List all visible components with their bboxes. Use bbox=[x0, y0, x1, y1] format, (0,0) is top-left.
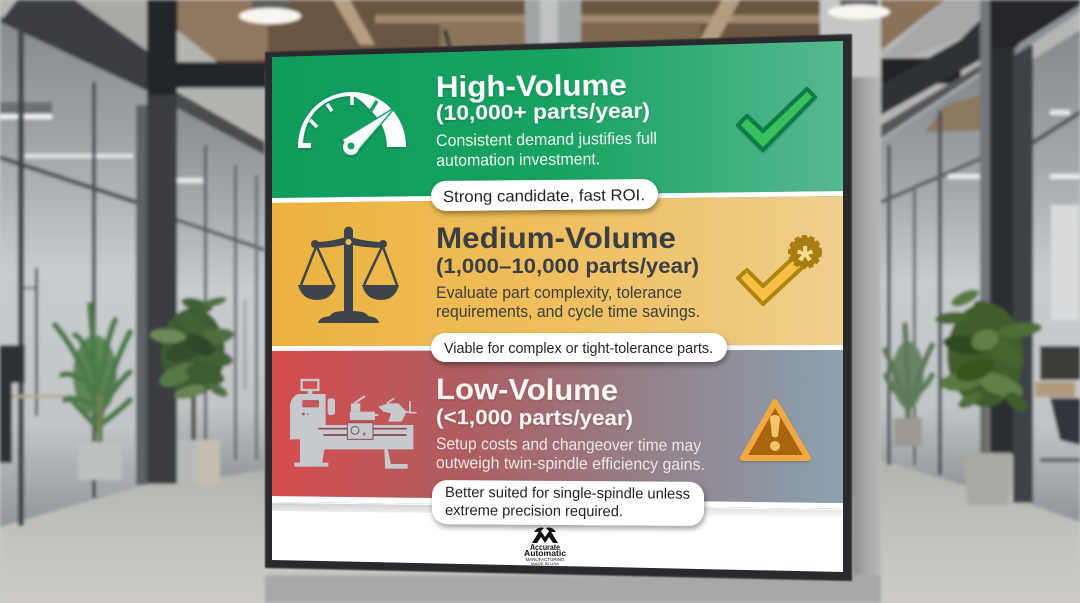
display frame bbox=[265, 34, 852, 581]
text: medium volume description bbox=[436, 284, 700, 321]
icon: warning triangle bbox=[743, 402, 808, 458]
callout: viable for complex parts bbox=[431, 333, 727, 362]
plant: left fig bbox=[149, 295, 235, 442]
panel: medium volume bbox=[272, 196, 843, 362]
panel: high volume bbox=[272, 41, 843, 211]
plant pot: left palm bbox=[78, 442, 122, 480]
panel: low volume bbox=[272, 350, 843, 572]
callout: viable for complex parts: Viable for complex or tight-tolerance parts. bbox=[444, 340, 713, 357]
callout: better suited for single-spindle bbox=[432, 480, 704, 526]
subheading: medium volume range: (1,000–10,000 parts/year) bbox=[436, 255, 699, 278]
ceiling bbox=[170, 0, 830, 70]
subheading: low volume range: (<1,000 parts/year) bbox=[436, 406, 633, 430]
logo: Accurate Automatic Manufacturing: Automatic bbox=[524, 549, 567, 558]
icon: speedometer gauge bbox=[298, 92, 406, 155]
callout: better suited for single-spindle: extreme precision required. bbox=[445, 502, 623, 520]
icon: check mark with asterisk badge: * bbox=[797, 237, 814, 284]
logo: Accurate Automatic Manufacturing: Accurate bbox=[530, 543, 560, 552]
text: medium volume description: Evaluate part complexity, tolerance bbox=[436, 284, 682, 302]
text: low volume description bbox=[436, 435, 705, 474]
floor bbox=[0, 470, 1080, 603]
plant: right fig bbox=[935, 286, 1043, 457]
plant pot: right fig bbox=[962, 453, 1012, 505]
ceiling lights bbox=[239, 0, 890, 24]
heading: Medium-Volume: Medium-Volume bbox=[436, 222, 676, 255]
callout: strong candidate bbox=[431, 179, 658, 211]
text: medium volume description: requirements, and cycle time savings. bbox=[436, 303, 700, 321]
logo: Accurate Automatic Manufacturing: MANUFACTURING bbox=[526, 557, 565, 562]
right glass wall bbox=[881, 0, 1080, 522]
far glass bay bbox=[177, 95, 265, 484]
heading: Low-Volume: Low-Volume bbox=[436, 373, 618, 407]
plant: small right background bbox=[885, 325, 932, 420]
display column bbox=[265, 0, 881, 603]
subheading: high volume range: (10,000+ parts/year) bbox=[436, 100, 650, 125]
logo: Accurate Automatic Manufacturing bbox=[524, 528, 567, 566]
callout: better suited for single-spindle: Better suited for single-spindle unless bbox=[445, 484, 690, 503]
logo: Accurate Automatic Manufacturing: MADE IN USA bbox=[531, 561, 559, 566]
callout: strong candidate: Strong candidate, fast ROI. bbox=[443, 187, 645, 206]
text: low volume description: Setup costs and changeover time may bbox=[436, 435, 702, 455]
icon: green check mark bbox=[738, 89, 815, 150]
text: high volume description bbox=[436, 130, 657, 170]
text: low volume description: outweigh twin-spindle efficiency gains. bbox=[436, 454, 705, 474]
icon: check mark with asterisk badge bbox=[738, 237, 820, 304]
plant: left palm bbox=[55, 305, 130, 440]
heading: High-Volume: High-Volume bbox=[436, 69, 627, 104]
icon: lathe machine bbox=[290, 380, 417, 469]
plant pot: left fig bbox=[177, 440, 220, 484]
plant pot: small right bbox=[894, 418, 922, 446]
icon: balance scale bbox=[298, 226, 399, 323]
text: high volume description: automation investment. bbox=[436, 150, 600, 170]
left glass wall bbox=[0, 0, 267, 527]
text: high volume description: Consistent demand justifies full bbox=[436, 130, 657, 150]
